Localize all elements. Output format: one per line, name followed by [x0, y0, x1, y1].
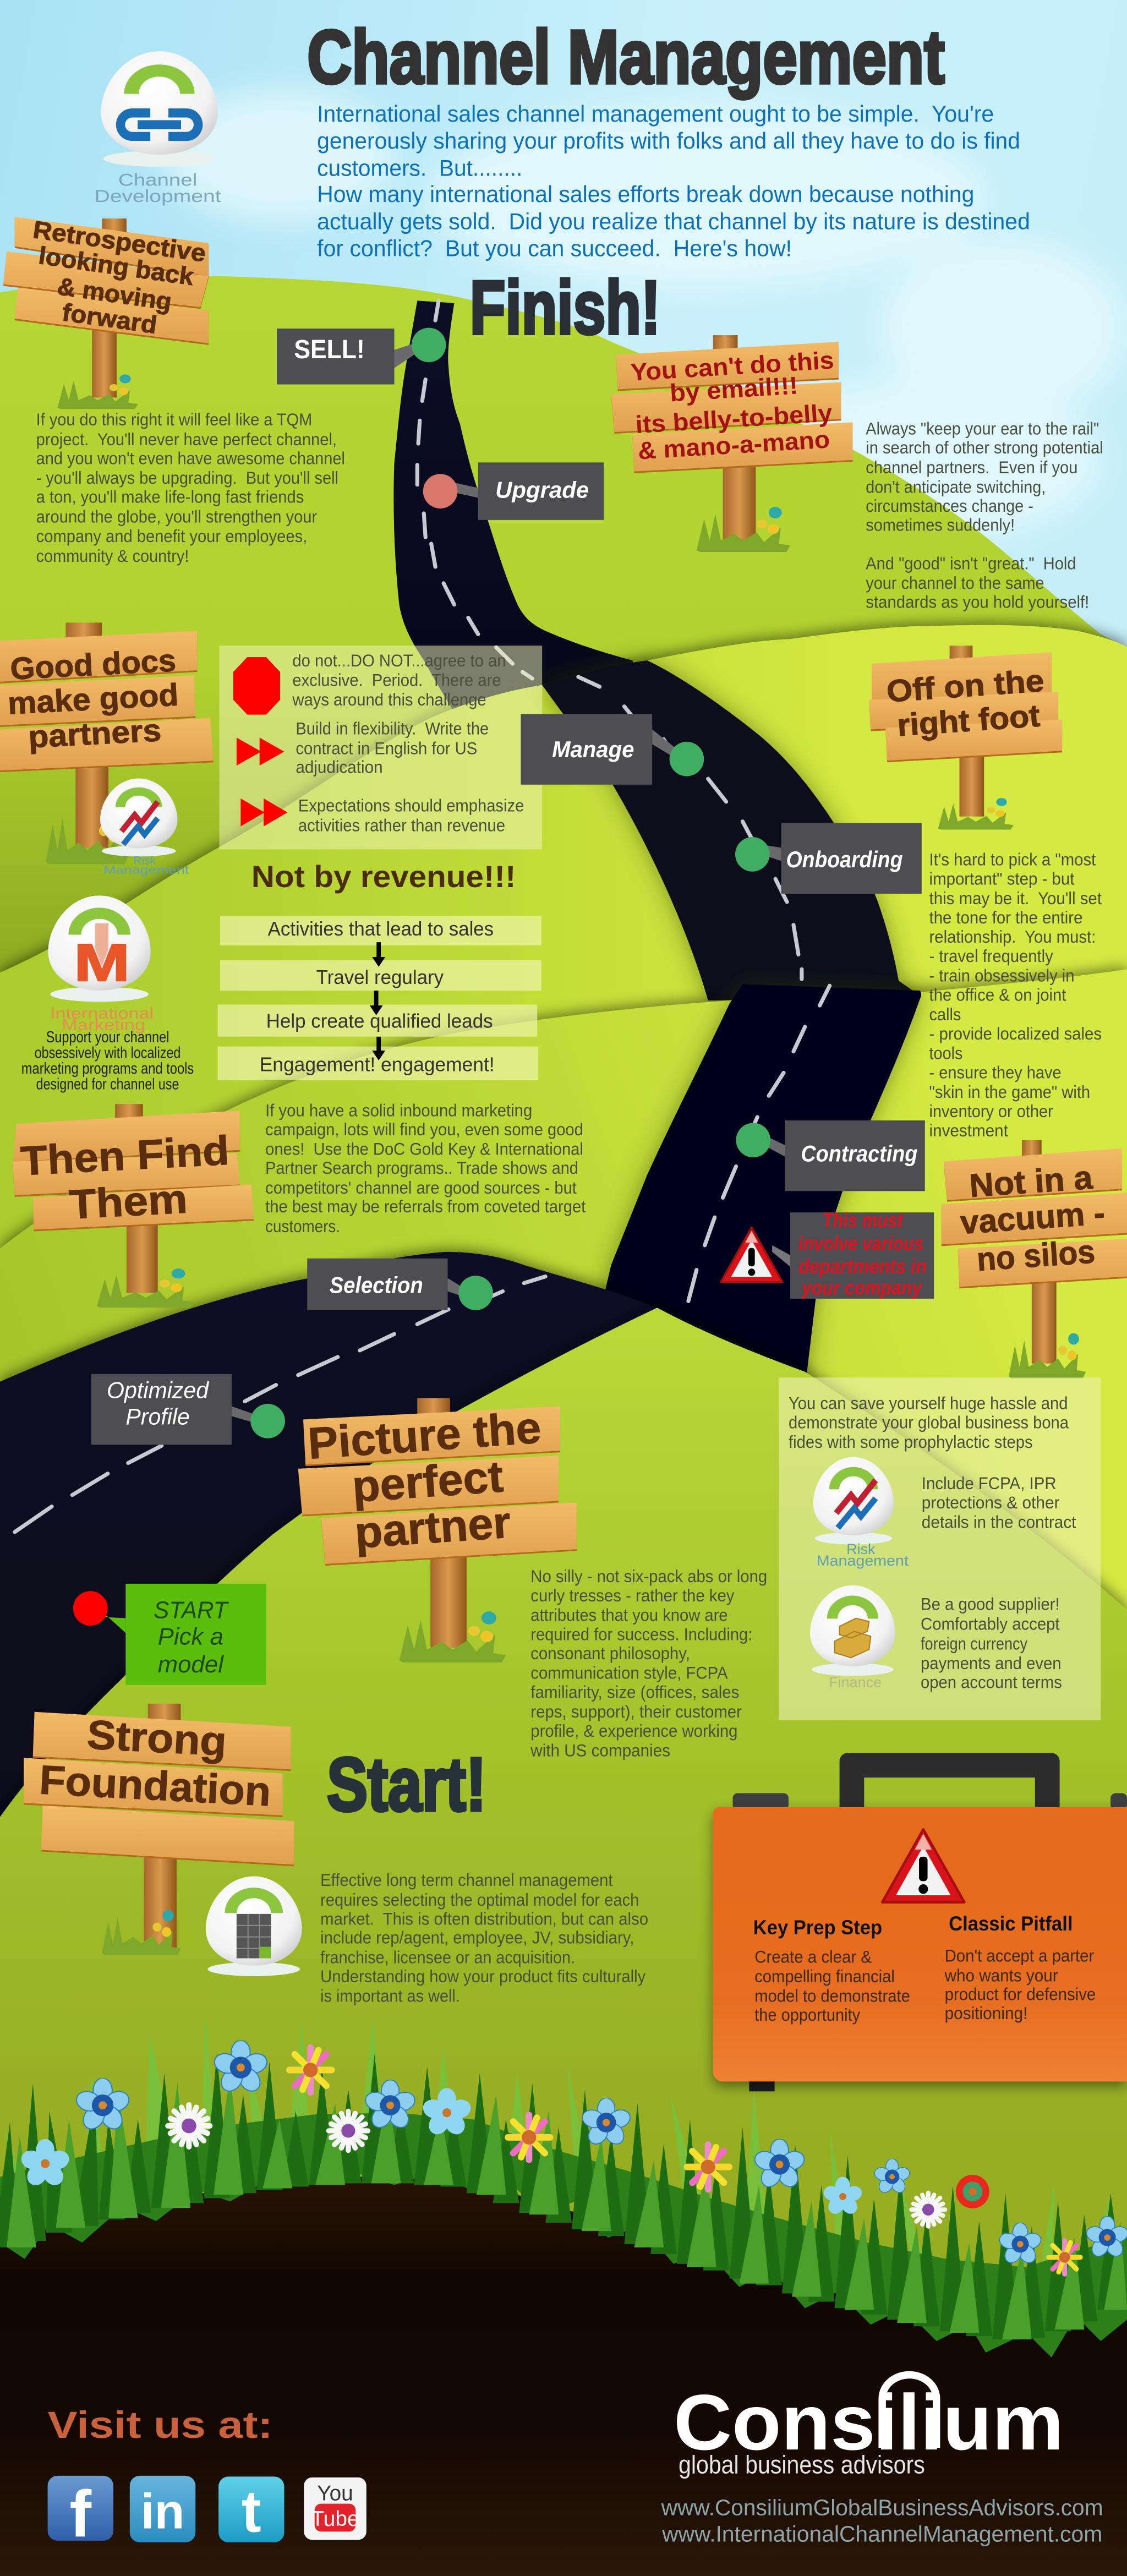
intro text: International sales channel management ought to be simple. You're	[317, 101, 994, 127]
text: onboarding body: relationship. You must:	[929, 927, 1096, 947]
logo: Consilium: Consilium	[674, 2378, 1064, 2466]
panel: prophylactic steps: Include FCPA, IPR	[922, 1473, 1057, 1493]
icon: double arrow two	[240, 798, 287, 827]
road: contracting segment	[600, 984, 921, 1388]
text: retrospective body: - you'll always be upgrading. But you'll sell	[36, 468, 338, 488]
sign: can't do this by email: & mano-a-mano	[637, 425, 830, 465]
panel: prophylactic steps: demonstrate your global business bona	[789, 1413, 1069, 1432]
sign: then find them: Them	[68, 1175, 189, 1228]
intro text: for conflict? But you can succeed. Here's how!	[317, 236, 792, 261]
classic pitfall: product for defensive	[945, 1984, 1096, 2004]
sign: picture the perfect partner	[298, 1398, 577, 1662]
sign: retrospective: looking back	[37, 242, 195, 291]
visit us heading: Visit us at:	[48, 2404, 273, 2446]
text: inbound marketing: Partner Search programs.. Trade shows and	[265, 1158, 578, 1178]
text: ear to the rail: in search of other strong potential	[866, 437, 1103, 457]
icon: risk management small: Management	[103, 864, 189, 877]
website links	[661, 2495, 1103, 2546]
sign: good docs	[0, 622, 214, 864]
text: ear to the rail: Always "keep your ear to the rail"	[866, 419, 1099, 439]
sign: good docs: Good docs	[9, 643, 177, 687]
sign: can't do this by email	[611, 335, 852, 552]
intro text: actually gets sold. Did you realize that channel by its nature is destined	[317, 208, 1030, 234]
sign: good docs: make good	[7, 678, 179, 721]
text: inbound marketing: competitors' channel are good sources - but	[265, 1178, 577, 1197]
callout: warning departments	[721, 1208, 934, 1299]
text: onboarding body: important" step - but	[929, 869, 1075, 889]
text: retrospective body: company and benefit your employees,	[36, 526, 307, 546]
key prep step: compelling financial	[754, 1966, 895, 1986]
label: Selection: Selection	[330, 1272, 423, 1298]
text: onboarding body: tools	[929, 1043, 962, 1063]
panel: do not agree: do not...DO NOT...agree to an	[292, 650, 506, 670]
text: support channel: Support your channel	[46, 1029, 169, 1046]
panel: prophylactic steps	[779, 1377, 1101, 1720]
sign: strong foundation	[24, 1704, 294, 1955]
road: selection segment	[0, 1252, 805, 1873]
text: key attributes: familiarity, size (offices, sales	[530, 1682, 739, 1702]
label: Upgrade: Upgrade	[495, 477, 589, 503]
label: Onboarding	[735, 823, 922, 894]
intro text	[317, 101, 1030, 261]
icon: finance	[810, 1585, 895, 1691]
road: finish segment	[393, 300, 657, 789]
grass	[0, 2012, 1127, 2358]
sign: strong foundation: Foundation	[39, 1757, 272, 1814]
text: retrospective body: community & country!	[36, 546, 189, 566]
callout: warning departments: involve various	[798, 1232, 923, 1255]
icon: linkedin: in	[141, 2484, 184, 2539]
sign: not in a vacuum: Not in a	[968, 1159, 1094, 1204]
sign: retrospective: Retrospective	[31, 216, 207, 267]
text: effective channel management: franchise, licensee or an acquisition.	[320, 1947, 575, 1967]
label: SELL	[277, 328, 446, 385]
flowers	[19, 2041, 1127, 2274]
icon: youtube	[304, 2477, 366, 2540]
panel: prophylactic steps: payments and even	[921, 1653, 1062, 1673]
text: retrospective body	[36, 409, 345, 566]
heading: Start: Start!	[327, 1743, 486, 1827]
icon: risk management: Risk	[846, 1541, 876, 1557]
text: ear to the rail: your channel to the same	[866, 573, 1044, 593]
callout: warning departments: departments in	[798, 1255, 927, 1278]
icon: double arrow one	[237, 737, 284, 765]
sign: off on the right foot: Off on the	[885, 664, 1045, 709]
label: Upgrade	[423, 462, 604, 520]
label: Onboarding: Onboarding	[786, 846, 902, 872]
callout: start pick a model	[73, 1584, 266, 1685]
icon: channel development: Channel	[118, 170, 197, 189]
list: activities: Engagement! engagement!	[260, 1053, 495, 1075]
clouds	[165, 90, 1125, 542]
icon: linkedin	[130, 2476, 195, 2542]
text: inbound marketing: ones! Use the DoC Gold Key & International	[265, 1139, 583, 1159]
text: onboarding body: - train obsessively in	[929, 965, 1074, 985]
classic pitfall: who wants your	[944, 1965, 1058, 1985]
icon: stop octagon	[233, 657, 280, 715]
key prep step: Create a clear &	[754, 1947, 872, 1967]
label: Selection	[307, 1259, 493, 1310]
sign: picture the perfect partner: Picture the	[307, 1403, 543, 1469]
text: support channel: obsessively with localized	[35, 1044, 180, 1062]
sign: then find them	[12, 1104, 254, 1308]
road: manage and onboarding segment	[542, 660, 920, 1000]
text: key attributes: profile, & experience working	[530, 1721, 737, 1741]
text: support channel	[21, 1029, 194, 1093]
text: key attributes	[530, 1566, 767, 1760]
callout: start pick a model: Pick a	[158, 1623, 223, 1650]
text: effective channel management: include rep/agent, employee, JV, subsidiary,	[320, 1928, 634, 1948]
sign: retrospective: & moving	[56, 272, 173, 316]
text: support channel: designed for channel use	[36, 1075, 179, 1093]
sign: off on the right foot: right foot	[896, 699, 1041, 743]
icon: warning	[721, 1228, 783, 1282]
sign: picture the perfect partner: perfect	[351, 1452, 505, 1512]
key prep step: the opportunity	[754, 2005, 860, 2025]
text: ear to the rail	[866, 419, 1103, 612]
website links: www.InternationalChannelManagement.com	[661, 2521, 1102, 2546]
label: SELL: SELL!	[294, 335, 365, 364]
text: ear to the rail: channel partners. Even if you	[866, 457, 1077, 477]
text: ear to the rail: standards as you hold yourself!	[866, 592, 1089, 612]
text: inbound marketing: customers.	[265, 1216, 340, 1236]
icon: international marketing	[48, 895, 154, 1034]
text: onboarding body: the tone for the entire	[929, 907, 1082, 927]
sign: can't do this by email: You can't do this	[630, 346, 835, 386]
classic pitfall	[944, 1912, 1096, 2023]
text: onboarding body	[929, 849, 1102, 1140]
sign: strong foundation: Strong	[86, 1711, 228, 1764]
sign: picture the perfect partner: partner	[353, 1498, 512, 1558]
arrows down	[370, 942, 385, 1060]
callout: warning departments: your company	[801, 1276, 923, 1299]
text: onboarding body: - provide localized sales	[929, 1024, 1102, 1043]
text: retrospective body: If you do this right it will feel like a TQM	[36, 409, 312, 429]
intro text: customers. But........	[317, 155, 522, 181]
callout: warning departments: This must	[822, 1208, 904, 1232]
panel: do not agree: adjudication	[296, 757, 383, 777]
text: retrospective body: project. You'll never have perfect channel,	[36, 429, 337, 449]
sign: retrospective	[3, 216, 209, 409]
list: activities: Travel regulary	[316, 966, 444, 988]
text: onboarding body: the office & on joint	[929, 985, 1066, 1005]
classic pitfall: Classic Pitfall	[949, 1912, 1073, 1935]
label: Optimized Profile	[91, 1374, 285, 1445]
callout: start pick a model: model	[158, 1651, 224, 1678]
text: ear to the rail: don't anticipate switching,	[866, 477, 1046, 497]
text: inbound marketing: If you have a solid inbound marketing	[265, 1101, 532, 1120]
text: ear to the rail: sometimes suddenly!	[866, 515, 1015, 534]
website links: www.ConsiliumGlobalBusinessAdvisors.com	[661, 2495, 1103, 2520]
text: key attributes: consonant philosophy,	[530, 1643, 690, 1663]
hill: lower	[0, 1308, 1127, 2576]
sign: not in a vacuum: no silos	[976, 1233, 1096, 1278]
text: key attributes: attributes that you know are	[530, 1605, 728, 1625]
icon: risk management small: Risk	[133, 854, 156, 867]
panel: do not agree: Expectations should emphasize	[298, 796, 524, 816]
hill: upper green	[0, 276, 1127, 1643]
text: effective channel management: requires selecting the optimal model for each	[320, 1890, 639, 1910]
text: onboarding body: It's hard to pick a "most	[929, 849, 1096, 869]
text: retrospective body: a ton, you'll make life-long fast friends	[36, 487, 304, 507]
panel: prophylactic steps: Be a good supplier!	[921, 1594, 1060, 1614]
intro text: How many international sales efforts break down because nothing	[317, 181, 974, 207]
text: ear to the rail: circumstances change -	[866, 496, 1033, 516]
text: onboarding body: inventory or other	[929, 1101, 1053, 1121]
icon: youtube: You	[317, 2482, 353, 2506]
label: Manage	[521, 714, 704, 785]
briefcase	[713, 1753, 1127, 2091]
text: onboarding body: investment	[929, 1120, 1008, 1140]
label: Contracting: Contracting	[801, 1141, 917, 1167]
sign: good docs: partners	[28, 713, 162, 755]
panel: prophylactic steps: open account terms	[921, 1672, 1062, 1692]
text: key attributes: required for success. Including:	[530, 1625, 752, 1644]
intro text: generously sharing your profits with folks and all they have to do is find	[317, 128, 1020, 154]
panel: prophylactic steps: details in the contract	[922, 1512, 1076, 1532]
icon: risk management	[813, 1457, 909, 1569]
panel: prophylactic steps: You can save yourself huge hassle and	[789, 1393, 1068, 1413]
label: Optimized Profile: Profile	[125, 1403, 190, 1429]
text: key attributes: No silly - not six-pack abs or long	[530, 1566, 767, 1586]
icon: channel development: Development	[95, 187, 221, 206]
label: Manage: Manage	[552, 736, 634, 762]
icon: international marketing: International	[50, 1005, 154, 1022]
sign: not in a vacuum: vacuum -	[959, 1194, 1106, 1241]
hill: middle left and right	[0, 625, 1127, 1807]
sign: not in a vacuum	[942, 1140, 1127, 1379]
panel: prophylactic steps: protections & other	[922, 1492, 1060, 1512]
callout: start pick a model: START	[154, 1598, 229, 1624]
icon: finance: Finance	[829, 1674, 882, 1691]
key prep step: Key Prep Step	[753, 1916, 882, 1939]
key prep step	[753, 1916, 910, 2025]
text: inbound marketing: campaign, lots will find you, even some good	[265, 1119, 583, 1139]
text: onboarding body: calls	[929, 1004, 961, 1024]
icon: channel development	[95, 51, 221, 206]
sign: off on the right foot	[869, 646, 1062, 830]
panel: do not agree: ways around this challenge	[292, 690, 486, 709]
text: key attributes: communication style, FCPA	[530, 1662, 728, 1682]
panel: do not agree: exclusive. Period. There are	[292, 670, 501, 690]
text: key attributes: reps, support), their customer	[530, 1702, 742, 1721]
text: inbound marketing: the best may be referrals from coveted target	[265, 1196, 586, 1216]
heading: not by revenue: Not by revenue!!!	[251, 860, 516, 894]
icon: facebook	[48, 2476, 113, 2551]
panel: prophylactic steps: Comfortably accept	[921, 1614, 1060, 1633]
text: onboarding body: this may be it. You'll set	[929, 888, 1102, 908]
text: effective channel management: Effective long term channel management	[320, 1870, 613, 1890]
soil	[0, 2170, 1127, 2576]
classic pitfall: positioning!	[945, 2003, 1027, 2023]
label: Contracting	[736, 1120, 925, 1191]
list: activities: Activities that lead to sales	[268, 918, 494, 940]
text: retrospective body: around the globe, you'll strengthen your	[36, 506, 317, 526]
icon: facebook: f	[69, 2477, 91, 2551]
list: activities	[218, 916, 541, 1080]
icon: risk management: Management	[817, 1552, 909, 1569]
icon: risk management small	[100, 779, 189, 877]
icon: twitter: t	[242, 2478, 261, 2544]
list: activities: Help create qualified leads	[266, 1010, 493, 1032]
icon: twitter	[218, 2476, 284, 2544]
icon: international marketing: M	[74, 934, 130, 992]
hill: lower middle	[0, 969, 1127, 1971]
classic pitfall: Don't accept a parter	[945, 1945, 1094, 1965]
text: onboarding body: - ensure they have	[929, 1063, 1062, 1082]
text: effective channel management: Understanding how your product fits culturally	[320, 1966, 645, 1986]
sign: can't do this by email: its belly-to-belly	[634, 399, 833, 439]
icon: youtube: Tube	[311, 2507, 359, 2531]
sign: then find them: Then Find	[20, 1127, 231, 1184]
text: key attributes: curly tresses - rather the key	[530, 1585, 735, 1605]
road centre dashes	[15, 300, 830, 1532]
panel: do not agree: contract in English for US	[296, 738, 477, 758]
text: effective channel management: is important as well.	[320, 1986, 460, 2005]
text: support channel: marketing programs and tools	[21, 1060, 194, 1078]
title: Channel Management	[307, 15, 945, 100]
panel: do not agree: activities rather than revenue	[298, 816, 505, 835]
text: key attributes: with US companies	[530, 1740, 670, 1760]
panel: do not agree: Build in flexibility. Write the	[296, 718, 489, 738]
heading: Finish: Finish!	[470, 266, 660, 350]
panel: prophylactic steps: fides with some prophylactic steps	[789, 1432, 1033, 1452]
icon: warning	[882, 1829, 964, 1902]
text: inbound marketing	[265, 1101, 586, 1236]
text: effective channel management: market. This is often distribution, but can also	[320, 1908, 648, 1928]
text: onboarding body: - travel frequently	[929, 946, 1053, 966]
sign: retrospective: forward	[61, 298, 158, 339]
text: onboarding body: "skin in the game" with	[929, 1082, 1090, 1102]
label: Optimized Profile: Optimized	[107, 1377, 210, 1403]
sign: can't do this by email: by email!!!	[669, 371, 798, 407]
key prep step: model to demonstrate	[754, 1986, 910, 2005]
text: retrospective body: and you won't even have awesome channel	[36, 448, 345, 468]
panel: prophylactic steps: foreign currency	[921, 1633, 1027, 1653]
text: ear to the rail: And "good" isn't "great." Hold	[866, 554, 1076, 573]
logo: Consilium: global business advisors	[679, 2450, 925, 2479]
icon: international marketing: Marketing	[62, 1016, 145, 1034]
panel: do not agree	[220, 646, 542, 849]
icon: channel model	[206, 1876, 302, 1976]
text: effective channel management	[320, 1870, 648, 2005]
